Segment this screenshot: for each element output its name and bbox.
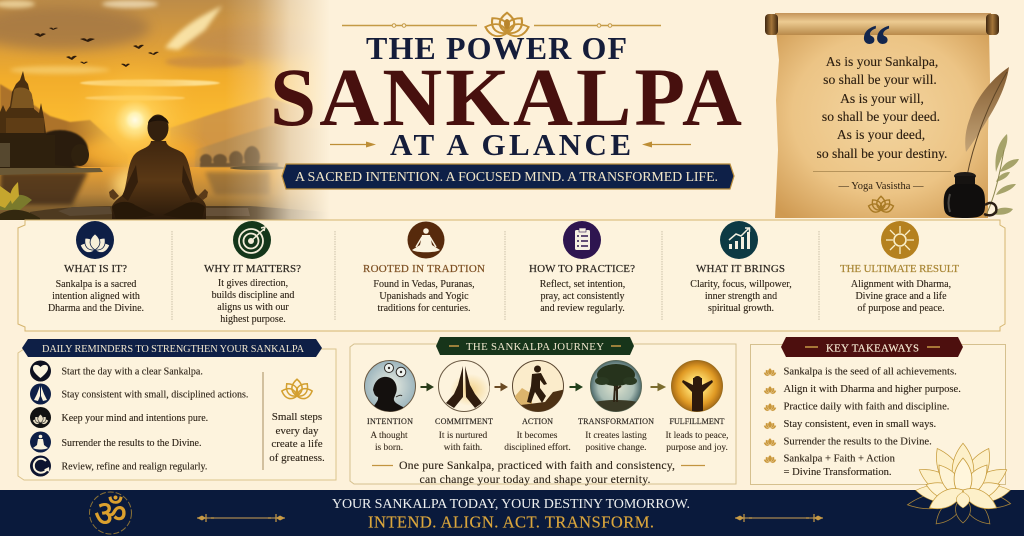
body bbox=[540, 279, 625, 314]
panel: daily reminders bbox=[18, 339, 336, 480]
body: highest purpose. bbox=[220, 314, 286, 325]
arrow bbox=[495, 384, 507, 390]
heading line 1: THE POWER OF bbox=[366, 30, 627, 66]
panel: six key points bbox=[18, 220, 1005, 331]
icon: lotus bbox=[76, 221, 114, 259]
description bbox=[585, 431, 647, 453]
header banner: KEY TAKEAWAYS bbox=[826, 342, 919, 354]
side note: of greatness. bbox=[269, 452, 325, 464]
step: action bbox=[504, 360, 571, 453]
body: Divine grace and a life bbox=[855, 291, 947, 302]
frame bbox=[750, 344, 1006, 484]
body: pray, act consistently bbox=[540, 291, 625, 302]
closing message: can change your today and shape your eternity. bbox=[420, 472, 651, 486]
quote text: so shall be your deed. bbox=[822, 109, 940, 124]
meditating figure bbox=[109, 114, 208, 219]
arrow bbox=[651, 384, 665, 390]
reminder 1: Start the day with a clear Sankalpa. bbox=[62, 366, 203, 378]
description bbox=[439, 431, 488, 453]
body: spiritual growth. bbox=[708, 303, 774, 314]
heading: WHAT IS IT? bbox=[64, 263, 127, 275]
side note: every day bbox=[275, 425, 319, 437]
body: It gives direction, bbox=[218, 278, 288, 289]
side note: create a life bbox=[271, 438, 323, 450]
takeaways list bbox=[763, 366, 961, 478]
body bbox=[373, 279, 475, 314]
body: Found in Vedas, Puranas, bbox=[373, 279, 475, 290]
label: INTENTION bbox=[367, 417, 413, 426]
frame bbox=[18, 349, 336, 480]
reminder 4: Surrender the results to the Divine. bbox=[62, 438, 201, 449]
illustration: tree bbox=[590, 360, 642, 412]
quote text: As is your Sankalpa, bbox=[826, 54, 938, 69]
body: Reflect, set intention, bbox=[540, 279, 625, 290]
illustration: thinking head bbox=[364, 360, 416, 412]
column: rooted in tradition bbox=[363, 222, 485, 314]
frame bbox=[350, 344, 736, 484]
description: It creates lasting bbox=[585, 431, 647, 441]
title block bbox=[270, 13, 742, 189]
footer line 2: INTEND. ALIGN. ACT. TRANSFORM. bbox=[368, 512, 654, 532]
reminder 5: Review, refine and realign regularly. bbox=[62, 462, 207, 472]
icon: meditator bbox=[30, 432, 51, 452]
reminder 4 bbox=[30, 432, 201, 452]
arrow bbox=[421, 384, 433, 390]
icon: heart bbox=[30, 360, 51, 382]
top roller bbox=[765, 13, 999, 35]
description: disciplined effort. bbox=[504, 442, 571, 453]
label: FULFILLMENT bbox=[670, 417, 725, 426]
body: aligns us with our bbox=[217, 302, 289, 313]
description: It leads to peace, bbox=[666, 431, 728, 441]
body: Alignment with Dharma, bbox=[851, 279, 951, 290]
header banner bbox=[781, 337, 963, 357]
dark lower petals bbox=[907, 490, 1012, 529]
quote mark: “ bbox=[861, 13, 891, 79]
hero image: sunrise meditation scene bbox=[0, 0, 340, 220]
reminder 3 bbox=[30, 407, 208, 428]
body: traditions for centuries. bbox=[377, 303, 471, 314]
header banner bbox=[436, 337, 634, 355]
arrow bbox=[570, 384, 582, 390]
icon: cycle bbox=[30, 456, 51, 476]
body: builds discipline and bbox=[212, 290, 294, 301]
heading line 3: AT A GLANCE bbox=[390, 127, 631, 162]
step: fulfillment bbox=[666, 360, 728, 453]
heading: HOW TO PRACTICE? bbox=[529, 263, 635, 275]
column: what is it bbox=[48, 221, 144, 314]
description: It becomes bbox=[517, 431, 558, 441]
panel: the Sankalpa journey bbox=[350, 337, 736, 486]
reminder 5 bbox=[30, 456, 207, 476]
description: A thought bbox=[370, 431, 408, 441]
reminder 2 bbox=[30, 384, 248, 404]
illustration: raised arms bbox=[672, 360, 722, 412]
body: Upanishads and Yogic bbox=[379, 291, 469, 302]
icon: growth chart bbox=[720, 221, 758, 259]
icon: quill bbox=[965, 67, 1009, 176]
heading: WHAT IT BRINGS bbox=[696, 263, 785, 275]
description: with faith. bbox=[444, 442, 482, 453]
tagline banner bbox=[282, 164, 734, 189]
heading: SANKALPA: SANKALPA bbox=[270, 51, 742, 143]
quote text: so shall be your destiny. bbox=[817, 146, 947, 161]
column: how to practice bbox=[529, 221, 635, 314]
label: TRANSFORMATION bbox=[578, 417, 654, 426]
quote text bbox=[817, 54, 947, 161]
body: Dharma and the Divine. bbox=[48, 303, 144, 314]
closing message: One pure Sankalpa, practiced with faith and consistency, bbox=[399, 458, 675, 472]
header banner bbox=[22, 339, 322, 357]
icon: praying hands bbox=[30, 384, 51, 404]
quote text: so shall be your will. bbox=[823, 72, 937, 87]
heading: WHY IT MATTERS? bbox=[204, 263, 301, 275]
body bbox=[690, 279, 792, 314]
step: intention bbox=[364, 360, 416, 453]
header banner: THE SANKALPA JOURNEY bbox=[466, 341, 604, 353]
quote text: As is your deed, bbox=[837, 127, 925, 142]
illustration: climbing figure bbox=[512, 360, 564, 412]
description: It is nurtured bbox=[439, 431, 488, 441]
tagline banner: A SACRED INTENTION. A FOCUSED MIND. A TRANSFORMED LIFE. bbox=[295, 170, 718, 185]
lotus ornament with rules bbox=[342, 13, 661, 39]
left flourish bbox=[197, 514, 285, 522]
quote scroll bbox=[765, 13, 1019, 218]
takeaways list: Surrender the results to the Divine. bbox=[784, 436, 932, 448]
step: commitment bbox=[435, 360, 493, 453]
description: purpose and joy. bbox=[666, 443, 728, 453]
body bbox=[48, 279, 144, 314]
reminder 2: Stay consistent with small, disciplined actions. bbox=[62, 390, 248, 400]
icon: sun bbox=[881, 221, 919, 259]
cream petals bbox=[914, 443, 1012, 515]
takeaways list: Stay consistent, even in small ways. bbox=[784, 419, 936, 430]
body: of purpose and peace. bbox=[857, 303, 945, 314]
takeaways list: Sankalpa is the seed of all achievements. bbox=[784, 366, 957, 378]
icon: om symbol: ॐ bbox=[94, 494, 127, 534]
closing message bbox=[372, 458, 705, 486]
footer line 1: YOUR SANKALPA TODAY, YOUR DESTINY TOMORROW. bbox=[332, 497, 690, 512]
description: positive change. bbox=[586, 443, 646, 453]
description bbox=[666, 431, 728, 453]
quote text: As is your will, bbox=[840, 91, 924, 106]
body: Clarity, focus, willpower, bbox=[690, 279, 792, 290]
takeaways list: Sankalpa + Faith + Action bbox=[784, 454, 896, 464]
heading: THE ULTIMATE RESULT bbox=[840, 263, 959, 275]
takeaways list: = Divine Transformation. bbox=[784, 467, 892, 478]
column: ultimate result bbox=[840, 221, 959, 314]
icon: target bbox=[233, 221, 271, 259]
icon: gold lotus bbox=[280, 379, 314, 401]
footer band bbox=[0, 490, 1024, 536]
body: inner strength and bbox=[705, 291, 777, 302]
side note: Small steps bbox=[272, 411, 322, 423]
panel frame bbox=[18, 220, 1005, 331]
column: what it brings bbox=[690, 221, 792, 314]
description bbox=[504, 431, 571, 453]
side note bbox=[269, 411, 325, 464]
takeaways list: Practice daily with faith and discipline. bbox=[784, 402, 949, 412]
large lotus bbox=[907, 443, 1012, 529]
small lotus bbox=[867, 196, 895, 214]
body bbox=[212, 278, 294, 325]
attribution: — Yoga Vasistha — bbox=[838, 181, 924, 192]
icon: leaves bbox=[985, 134, 1019, 217]
right flourish bbox=[735, 514, 823, 522]
body: intention aligned with bbox=[52, 291, 140, 302]
label: ACTION bbox=[522, 417, 553, 426]
parchment bbox=[775, 30, 990, 218]
body: and review regularly. bbox=[540, 303, 625, 314]
heading: ROOTED IN TRADTION bbox=[363, 263, 485, 275]
side flourishes bbox=[330, 142, 691, 148]
body: Sankalpa is a sacred bbox=[56, 279, 136, 290]
icon: checklist bbox=[563, 221, 601, 259]
icon: meditator bbox=[408, 222, 444, 258]
icon: ink bottle bbox=[944, 172, 996, 218]
panel: key takeaways bbox=[750, 337, 1006, 484]
step: transformation bbox=[578, 360, 654, 453]
illustration: praying hands bbox=[438, 360, 490, 412]
takeaways list: Align it with Dharma and higher purpose. bbox=[784, 384, 961, 395]
reminder 1 bbox=[30, 360, 203, 382]
reminder 3: Keep your mind and intentions pure. bbox=[62, 413, 208, 424]
body bbox=[851, 279, 951, 314]
description: is born. bbox=[375, 443, 403, 453]
label: COMMITMENT bbox=[435, 417, 493, 426]
hero fade to cream bbox=[225, 0, 330, 221]
column: why it matters bbox=[204, 221, 301, 325]
description bbox=[370, 431, 408, 453]
header banner: DAILY REMINDERS TO STRENGTHEN YOUR SANKALPA bbox=[42, 344, 305, 355]
icon: lotus bbox=[30, 407, 51, 428]
